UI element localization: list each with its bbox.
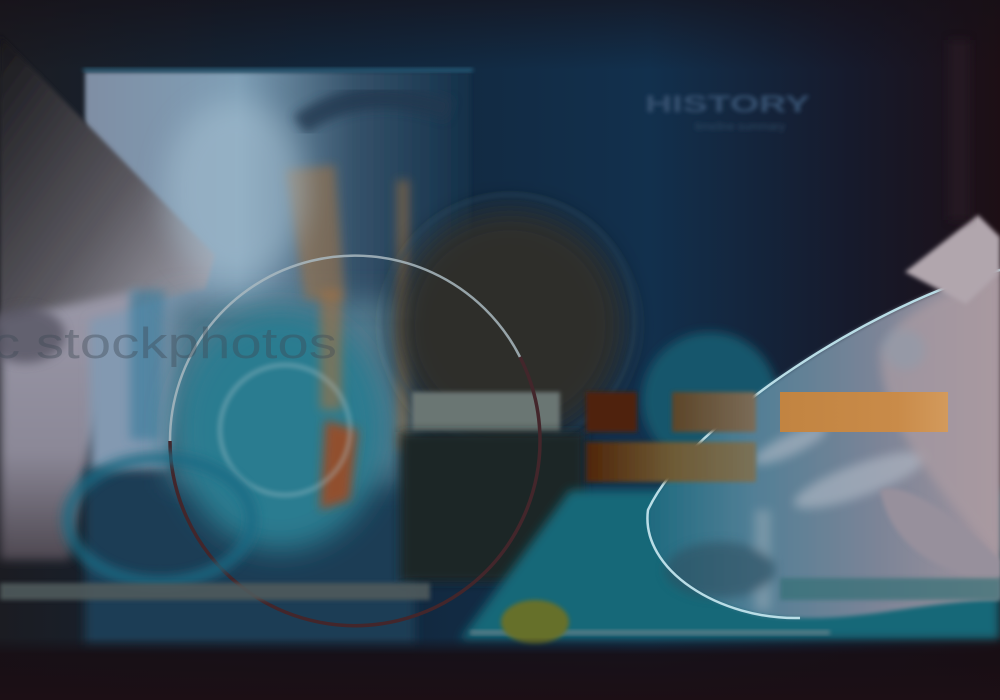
watermark: c stockphotos — [0, 319, 337, 368]
bottom lower stripe — [470, 630, 830, 635]
orange figure stripes — [285, 165, 409, 510]
dark swirl band at top of panel — [300, 98, 450, 125]
panel: dark wedge top left — [0, 35, 215, 330]
heading: HISTORY — [645, 91, 810, 118]
yellow blob — [501, 600, 569, 644]
bottom stripe right — [780, 578, 1000, 600]
light swirl in upper panel — [165, 100, 305, 280]
panel: left upper light panel — [83, 68, 473, 320]
panel: mid body fill behind figure — [170, 300, 410, 480]
bottom stripe left — [0, 583, 430, 600]
grey horizontal band — [412, 392, 560, 432]
blue streak — [130, 290, 165, 440]
earth outline stroke — [647, 270, 1000, 618]
teal arc disc — [642, 332, 778, 468]
top right diamond — [905, 215, 1000, 304]
panel: lower left navy body — [85, 470, 415, 645]
swirling cloud highlights — [665, 330, 931, 610]
inner ring figure — [220, 365, 350, 495]
lower left ring — [68, 458, 252, 582]
top right light column — [948, 40, 970, 220]
subheading: timeline summary — [695, 121, 786, 133]
panel: lower left grey area — [0, 290, 140, 560]
teal figure shape — [175, 310, 385, 550]
pink lower right lobe — [880, 488, 1000, 578]
dark brown sphere — [395, 210, 625, 440]
box 1 — [586, 392, 637, 432]
orange bar — [780, 392, 948, 432]
panel: blue left column — [90, 290, 205, 470]
large circle outline upper — [170, 256, 520, 441]
clouds at left edge — [0, 307, 65, 363]
dark ring around sphere — [385, 195, 635, 445]
brown boxes — [586, 392, 756, 482]
box 2 — [672, 392, 756, 432]
dark lower block — [400, 432, 585, 582]
pink right lobe — [880, 270, 1000, 560]
box 3 — [586, 442, 756, 482]
teal lower band — [460, 490, 1000, 640]
earth disk — [647, 270, 1000, 618]
large circle outline lower — [170, 357, 540, 626]
